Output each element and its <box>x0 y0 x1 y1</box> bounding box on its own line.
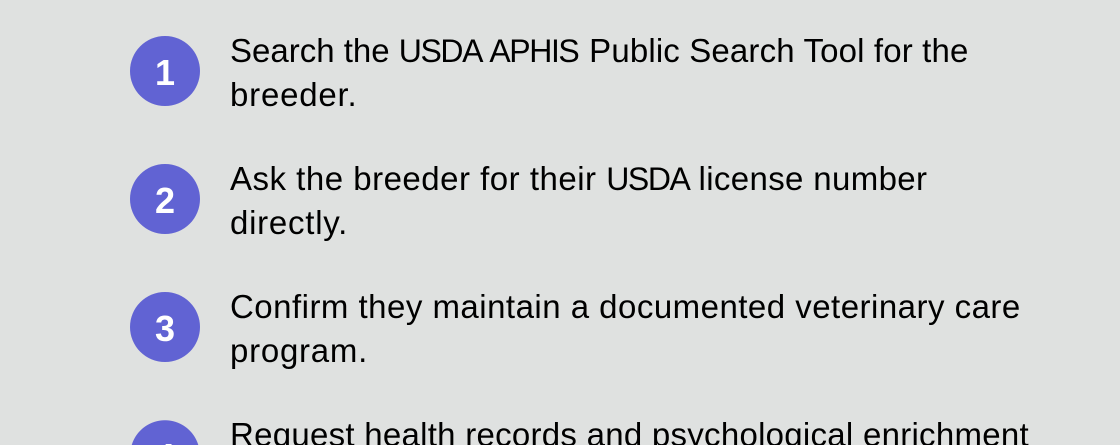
step 3: program. <box>230 332 368 369</box>
number badge 1: 1 <box>155 52 175 93</box>
number badge 2 <box>130 164 200 234</box>
number badge 3 <box>130 292 200 362</box>
step 1 <box>130 32 969 113</box>
step 2 text: Ask the breeder for their USDA license number <box>230 160 927 197</box>
number badge 4 <box>130 420 200 445</box>
step 2 <box>130 160 927 241</box>
step 4 <box>132 416 1029 445</box>
number badge 2: 2 <box>155 180 175 221</box>
number badge 3: 3 <box>155 308 175 349</box>
step 1: breeder. <box>230 76 358 113</box>
step 2: directly. <box>230 204 348 241</box>
step 3 text: Confirm they maintain a documented veterinary care <box>230 288 1021 325</box>
step 3 <box>130 288 1021 369</box>
number badge 1 <box>130 36 200 106</box>
step 1 text: Search the USDA APHIS Public Search Tool for the <box>230 32 969 69</box>
